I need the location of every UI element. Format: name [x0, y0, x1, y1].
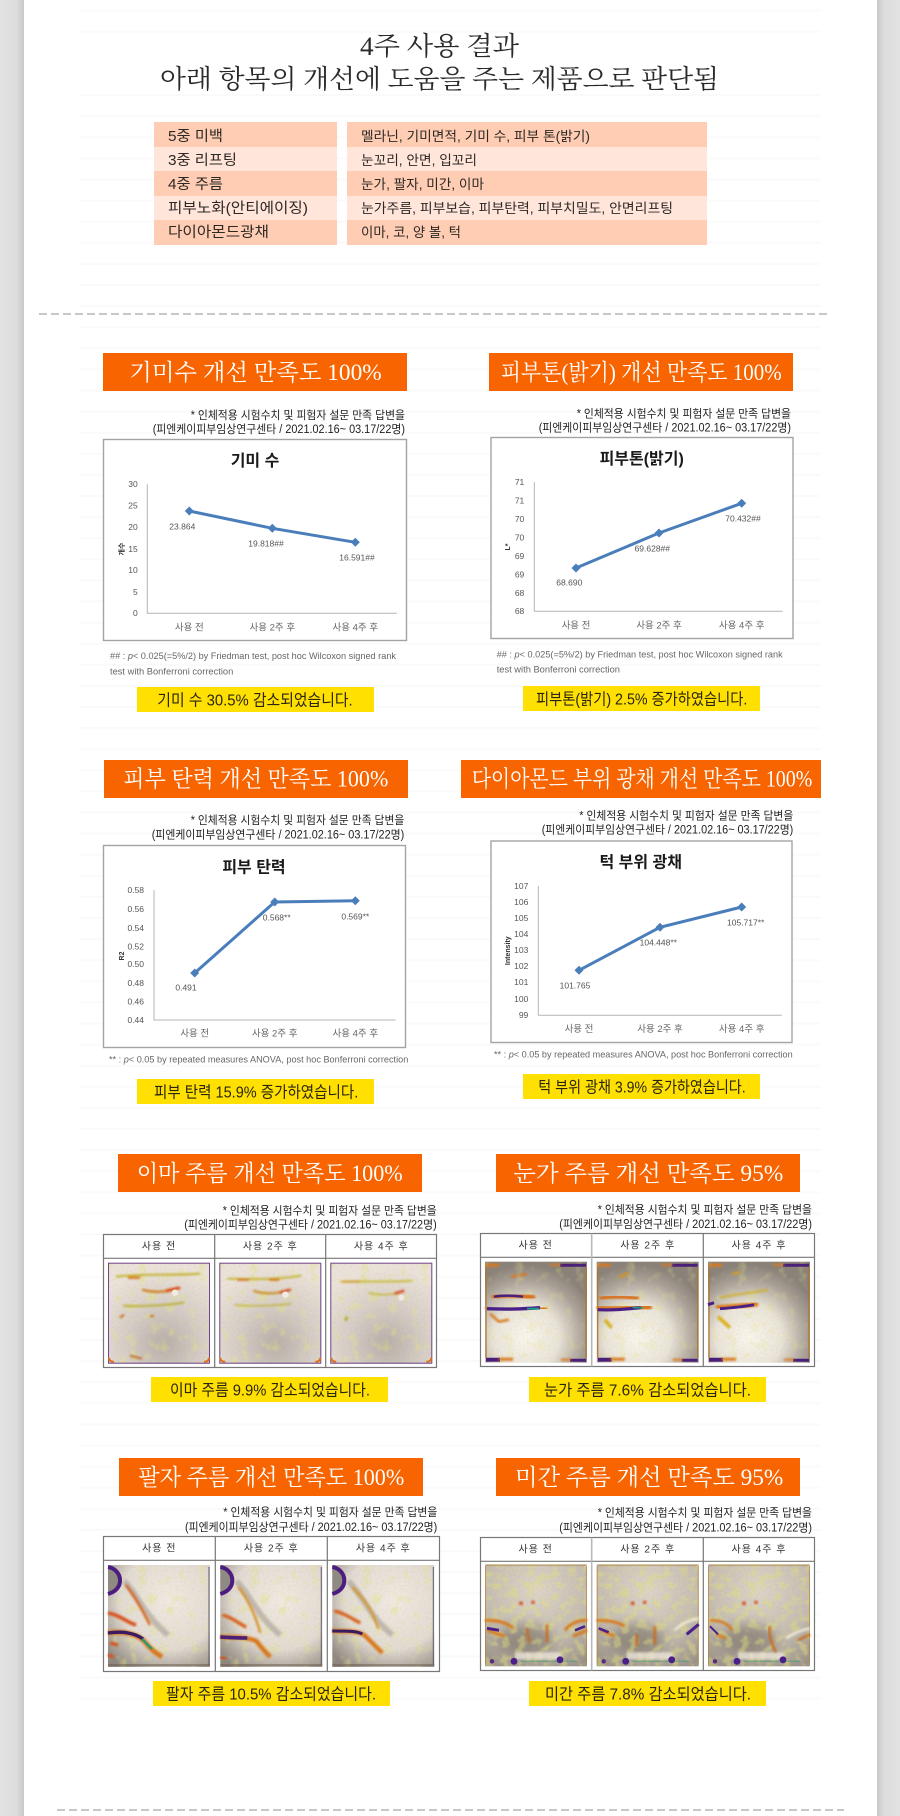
banner — [461, 760, 821, 798]
photo table — [480, 1538, 814, 1670]
photo table — [104, 1536, 440, 1672]
line chart: Intensity — [505, 936, 512, 965]
title: 아래 항목의 개선에 도움을 주는 제품으로 판단됨 — [160, 65, 719, 94]
line chart: 0.568** — [263, 913, 291, 923]
title — [160, 32, 719, 94]
result callout — [153, 1681, 390, 1706]
photo: before — [485, 1262, 587, 1363]
line chart: 사용 2주 후 — [250, 623, 295, 634]
line chart: 사용 전 — [562, 621, 590, 632]
footnote: ## : p< 0.025(=5%/2) by Friedman test, post hoc Wilcoxon signed rank — [110, 651, 396, 662]
line chart: 71 — [515, 496, 525, 506]
line chart: 피부 탄력 — [222, 858, 286, 876]
table: improvement items: 다이아몬드광채 — [168, 224, 269, 241]
footnote — [497, 649, 783, 676]
table: improvement items: 눈가, 팔자, 미간, 이마 — [361, 177, 485, 192]
banner — [496, 1458, 800, 1496]
line chart — [104, 846, 406, 1048]
line chart: 70 — [515, 514, 525, 524]
table: improvement items: 5중 미백 — [168, 128, 223, 145]
photo: 4 weeks — [332, 1565, 434, 1667]
note — [542, 809, 793, 836]
photo table: 사용 4주 후 — [356, 1542, 411, 1554]
line chart — [104, 440, 406, 640]
note: (피엔케이피부임상연구센타 / 2021.02.16~ 03.17/22명) — [559, 1218, 812, 1231]
line chart: 104 — [514, 929, 529, 939]
line chart: 0.44 — [127, 1015, 144, 1025]
line chart: 사용 4주 후 — [333, 623, 378, 634]
panel: diamond area radiance — [461, 760, 821, 1099]
line chart: 69 — [515, 551, 525, 561]
result callout: 턱 부위 광채 3.9% 증가하였습니다. — [538, 1078, 746, 1096]
line chart: 20 — [128, 522, 138, 532]
line chart: 107 — [514, 881, 529, 891]
table: improvement items: 3중 리프팅 — [168, 152, 237, 169]
note — [539, 408, 791, 435]
photo: 2 weeks — [220, 1565, 322, 1667]
result callout: 기미 수 30.5% 감소되었습니다. — [157, 692, 353, 710]
result callout — [529, 1377, 766, 1402]
line chart: 기미 수 — [231, 452, 280, 470]
banner — [496, 1154, 800, 1192]
photo: 4 weeks — [330, 1263, 432, 1364]
table: improvement items — [154, 122, 707, 245]
result callout: 피부톤(밝기) 2.5% 증가하였습니다. — [536, 690, 747, 708]
line chart: 개수 — [117, 542, 126, 555]
note — [559, 1507, 812, 1535]
line chart: 사용 2주 후 — [252, 1029, 298, 1040]
banner — [103, 353, 407, 391]
table: improvement items: 피부노화(안티에이징) — [168, 200, 308, 217]
line chart: 68 — [515, 606, 525, 616]
line chart — [491, 841, 792, 1042]
result callout — [151, 1377, 388, 1402]
banner — [118, 1154, 422, 1192]
panel: forehead wrinkles — [104, 1154, 437, 1402]
line chart: 69.628## — [635, 543, 670, 553]
line chart: 105 — [514, 913, 529, 923]
line chart: 104.448** — [640, 938, 678, 948]
result callout — [137, 1079, 374, 1104]
result callout — [529, 1681, 766, 1706]
line chart: 5 — [133, 587, 138, 597]
note: * 인체적용 시험수치 및 피험자 설문 만족 답변을 — [191, 814, 404, 827]
footnote: ## : p< 0.025(=5%/2) by Friedman test, post hoc Wilcoxon signed rank — [497, 649, 783, 660]
line chart: 사용 4주 후 — [719, 621, 765, 632]
line chart: 피부톤(밝기) — [600, 450, 684, 468]
line chart: 0.54 — [127, 923, 144, 933]
result callout — [523, 686, 760, 711]
note: (피엔케이피부임상연구센타 / 2021.02.16~ 03.17/22명) — [559, 1522, 812, 1535]
panel: skin tone — [489, 353, 793, 711]
line chart: 106 — [514, 897, 529, 907]
note: (피엔케이피부임상연구센타 / 2021.02.16~ 03.17/22명) — [153, 423, 405, 436]
line chart: 0.50 — [127, 959, 144, 969]
photo table: 사용 2주 후 — [620, 1239, 675, 1251]
line chart: 0.56 — [127, 904, 144, 914]
photo: before — [108, 1263, 210, 1364]
panel: skin elasticity — [104, 760, 408, 1104]
note: * 인체적용 시험수치 및 피험자 설문 만족 답변을 — [598, 1203, 812, 1216]
line chart: 사용 2주 후 — [636, 621, 682, 632]
line chart: 70.432## — [725, 513, 761, 523]
line chart: 105.717** — [727, 917, 765, 927]
table: improvement items: 눈가주름, 피부보습, 피부탄력, 피부치밀도, 안면리프팅 — [361, 201, 673, 216]
note — [153, 409, 405, 436]
line chart: 10 — [128, 565, 138, 575]
result callout: 피부 탄력 15.9% 증가하였습니다. — [154, 1084, 358, 1102]
footnote: ** : p< 0.05 by repeated measures ANOVA, post hoc Bonferroni correction — [109, 1054, 408, 1065]
line chart: 0.48 — [127, 978, 144, 988]
line chart: R2 — [119, 951, 126, 960]
banner: 눈가 주름 개선 만족도 95% — [513, 1161, 783, 1186]
banner — [119, 1458, 423, 1496]
line chart: 68 — [515, 588, 525, 598]
line chart: 99 — [519, 1010, 529, 1020]
line chart: 70 — [515, 532, 525, 542]
table: improvement items: 4중 주름 — [168, 177, 223, 193]
banner: 미간 주름 개선 만족도 95% — [515, 1465, 783, 1490]
banner: 이마 주름 개선 만족도 100% — [137, 1161, 403, 1186]
note: * 인체적용 시험수치 및 피험자 설문 만족 답변을 — [223, 1506, 437, 1519]
photo table: 사용 2주 후 — [243, 1240, 298, 1252]
line chart: 0.46 — [127, 996, 144, 1006]
photo: 2 weeks — [597, 1564, 699, 1666]
photo table: 사용 전 — [519, 1239, 553, 1251]
note: * 인체적용 시험수치 및 피험자 설문 만족 답변을 — [598, 1507, 812, 1520]
photo: 4 weeks — [708, 1262, 810, 1363]
note: (피엔케이피부임상연구센타 / 2021.02.16~ 03.17/22명) — [152, 828, 404, 841]
footnote: test with Bonferroni correction — [497, 665, 620, 676]
photo table: 사용 4주 후 — [732, 1543, 786, 1555]
photo table: 사용 2주 후 — [620, 1543, 675, 1555]
footnote — [110, 651, 396, 678]
note: (피엔케이피부임상연구센타 / 2021.02.16~ 03.17/22명) — [539, 422, 791, 435]
photo table: 사용 4주 후 — [732, 1239, 786, 1251]
line chart: 0.58 — [127, 885, 144, 895]
line chart: 턱 부위 광채 — [599, 853, 682, 871]
note — [559, 1203, 812, 1231]
line chart: 102 — [514, 961, 529, 971]
note: (피엔케이피부임상연구센타 / 2021.02.16~ 03.17/22명) — [542, 823, 793, 836]
line chart: 사용 4주 후 — [719, 1024, 765, 1035]
line chart: 0.569** — [341, 911, 370, 921]
panel: under-eye wrinkles — [480, 1154, 814, 1402]
photo table — [480, 1234, 814, 1366]
line chart — [491, 438, 793, 638]
title: 4주 사용 결과 — [360, 32, 519, 61]
panel: glabella wrinkles — [480, 1458, 814, 1706]
line chart: 103 — [514, 945, 529, 955]
note: * 인체적용 시험수치 및 피험자 설문 만족 답변을 — [223, 1204, 437, 1217]
banner: 기미수 개선 만족도 100% — [129, 360, 382, 385]
line chart: 23.864 — [169, 521, 196, 531]
banner — [489, 353, 793, 391]
note — [152, 814, 404, 841]
line chart: L* — [505, 543, 512, 550]
photo table: 사용 전 — [142, 1542, 176, 1554]
panel: melasma count — [103, 353, 407, 712]
footnote: ** : p< 0.05 by repeated measures ANOVA, post hoc Bonferroni correction — [494, 1049, 793, 1060]
line chart: 15 — [128, 544, 138, 554]
line chart: 101 — [514, 977, 529, 987]
photo table: 사용 4주 후 — [354, 1240, 409, 1252]
line chart: 69 — [515, 570, 525, 580]
table: improvement items: 이마, 코, 양 볼, 턱 — [361, 225, 461, 240]
line chart: 사용 전 — [565, 1024, 593, 1035]
line chart: 101.765 — [560, 981, 591, 991]
line chart: 0 — [133, 608, 138, 618]
photo: 4 weeks — [708, 1564, 810, 1666]
line chart: 사용 전 — [175, 623, 204, 634]
table: improvement items: 눈꼬리, 안면, 입꼬리 — [361, 153, 477, 168]
banner — [104, 760, 408, 798]
line chart: 사용 2주 후 — [637, 1024, 683, 1035]
result callout: 미간 주름 7.8% 감소되었습니다. — [545, 1686, 751, 1704]
line chart: 25 — [128, 500, 138, 510]
banner: 피부톤(밝기) 개선 만족도 100% — [501, 360, 782, 385]
note: * 인체적용 시험수치 및 피험자 설문 만족 답변을 — [577, 408, 791, 421]
line chart: 68.690 — [556, 578, 583, 588]
banner: 피부 탄력 개선 만족도 100% — [123, 767, 388, 792]
line chart: 0.52 — [127, 942, 144, 952]
photo: before — [485, 1564, 587, 1666]
result callout: 이마 주름 9.9% 감소되었습니다. — [170, 1382, 370, 1400]
banner: 다이아몬드 부위 광채 개선 만족도 100% — [472, 767, 812, 792]
result callout — [523, 1074, 760, 1099]
photo table: 사용 2주 후 — [244, 1542, 299, 1554]
note — [184, 1204, 437, 1232]
note: (피엔케이피부임상연구센타 / 2021.02.16~ 03.17/22명) — [185, 1521, 437, 1534]
line chart: 100 — [514, 994, 529, 1004]
photo: 2 weeks — [597, 1262, 699, 1363]
line chart: 16.591## — [339, 553, 375, 563]
photo table — [104, 1234, 436, 1368]
line chart: 30 — [128, 479, 138, 489]
note: * 인체적용 시험수치 및 피험자 설문 만족 답변을 — [191, 409, 405, 422]
photo: before — [108, 1565, 210, 1667]
line chart: 사용 전 — [180, 1029, 209, 1040]
result callout: 눈가 주름 7.6% 감소되었습니다. — [544, 1382, 751, 1400]
note: (피엔케이피부임상연구센타 / 2021.02.16~ 03.17/22명) — [184, 1219, 437, 1232]
line chart: 71 — [515, 477, 525, 487]
line chart: 19.818## — [248, 539, 284, 549]
line chart: 사용 4주 후 — [333, 1029, 378, 1040]
table: improvement items: 멜라닌, 기미면적, 기미 수, 피부 톤(밝기) — [361, 129, 590, 144]
panel: nasolabial wrinkles — [104, 1458, 440, 1706]
result callout: 팔자 주름 10.5% 감소되었습니다. — [166, 1686, 376, 1704]
note — [185, 1506, 437, 1534]
photo table: 사용 전 — [519, 1543, 553, 1555]
banner: 팔자 주름 개선 만족도 100% — [138, 1465, 404, 1490]
photo: 2 weeks — [219, 1263, 321, 1364]
result callout — [137, 687, 374, 712]
photo table: 사용 전 — [142, 1240, 176, 1252]
note: * 인체적용 시험수치 및 피험자 설문 만족 답변을 — [579, 809, 793, 822]
footnote: test with Bonferroni correction — [110, 667, 233, 678]
line chart: 0.491 — [175, 983, 197, 993]
